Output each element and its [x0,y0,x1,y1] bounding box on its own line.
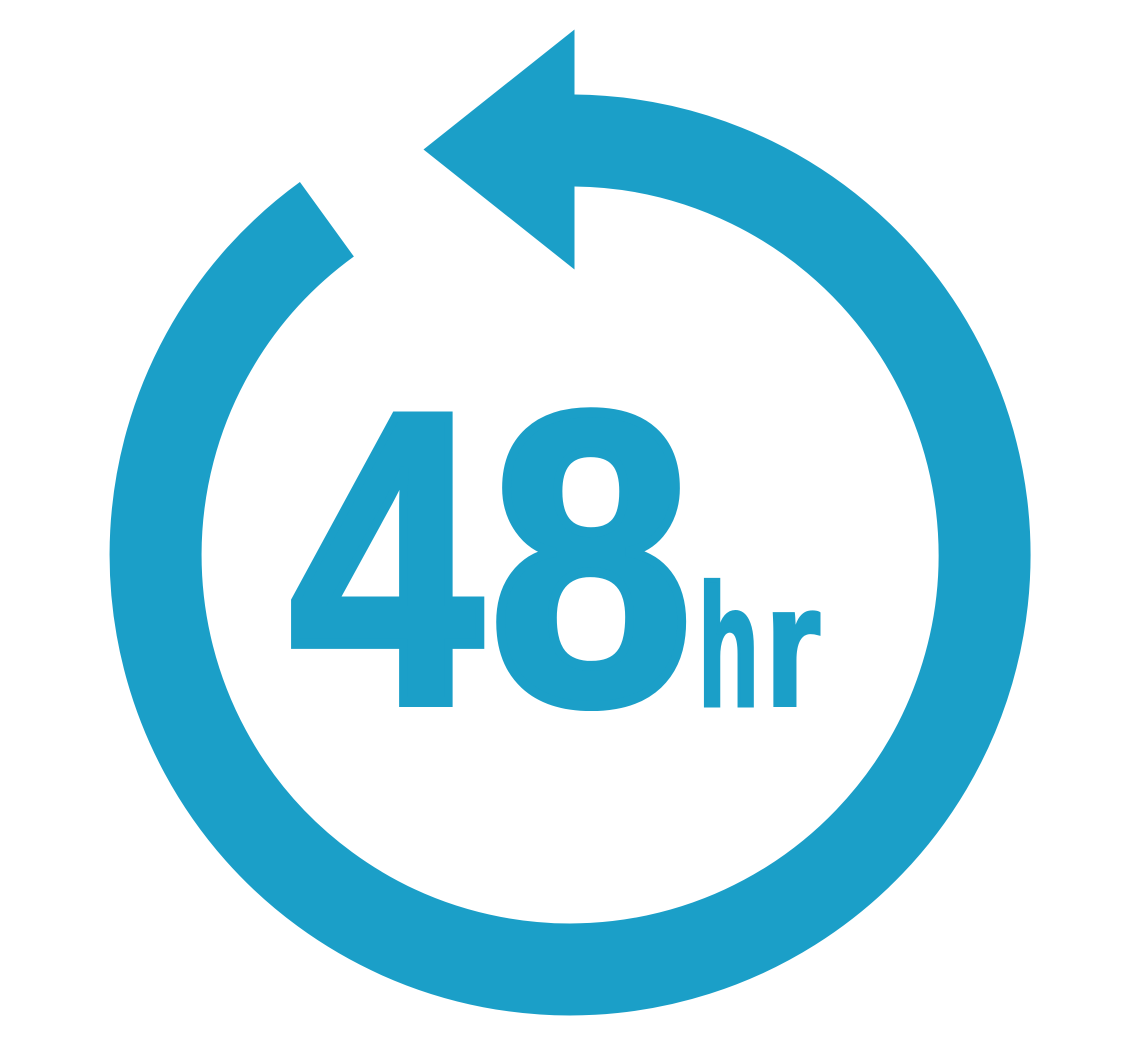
unit: r: r [765,550,821,742]
arrow head [424,30,574,270]
digit 8: 8 [489,326,693,790]
digit 4: 4 [290,326,484,790]
label: 48hr [290,326,821,790]
unit: h: h [698,550,758,742]
circular arrow ring [156,140,985,969]
